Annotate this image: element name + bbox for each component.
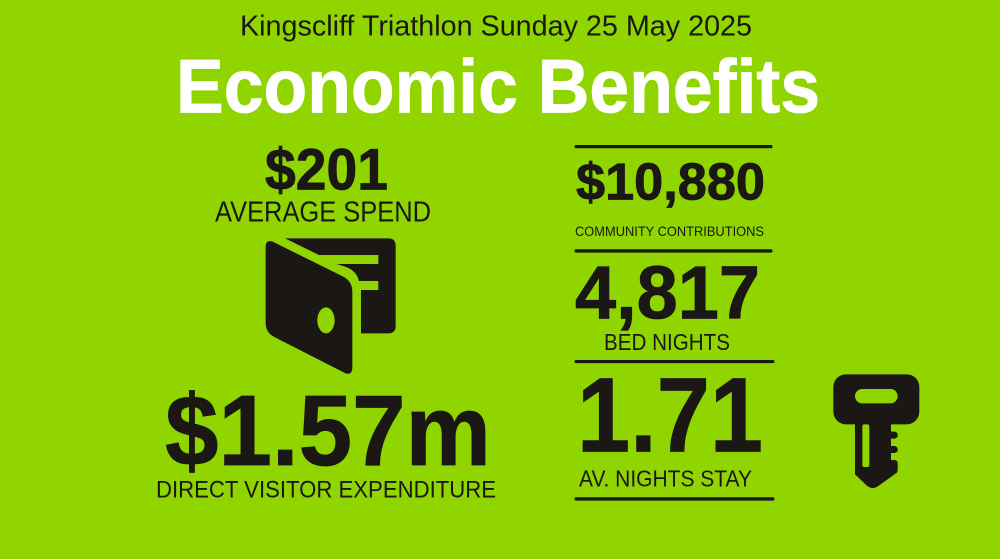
subtitle: Kingscliff Triathlon Sunday 25 May 2025 [240, 10, 752, 42]
panel: spending [156, 138, 496, 504]
panel: statistics [574, 145, 774, 501]
title: Economic Benefits [176, 44, 820, 130]
bed nights label: BED NIGHTS [604, 329, 730, 355]
icon: wallet [266, 238, 396, 374]
average spend label: AVERAGE SPEND [215, 197, 431, 229]
direct visitor expenditure label: DIRECT VISITOR EXPENDITURE [156, 476, 496, 504]
average nights stay value: 1.71 [577, 357, 763, 475]
direct visitor expenditure value: $1.57m [165, 375, 491, 487]
bed nights value: 4,817 [575, 250, 760, 334]
community contributions label: COMMUNITY CONTRIBUTIONS [575, 223, 764, 239]
average spend value: $201 [265, 138, 388, 202]
community contributions value: $10,880 [576, 154, 765, 212]
average nights stay label: AV. NIGHTS STAY [579, 466, 752, 492]
icon: key [833, 374, 919, 488]
